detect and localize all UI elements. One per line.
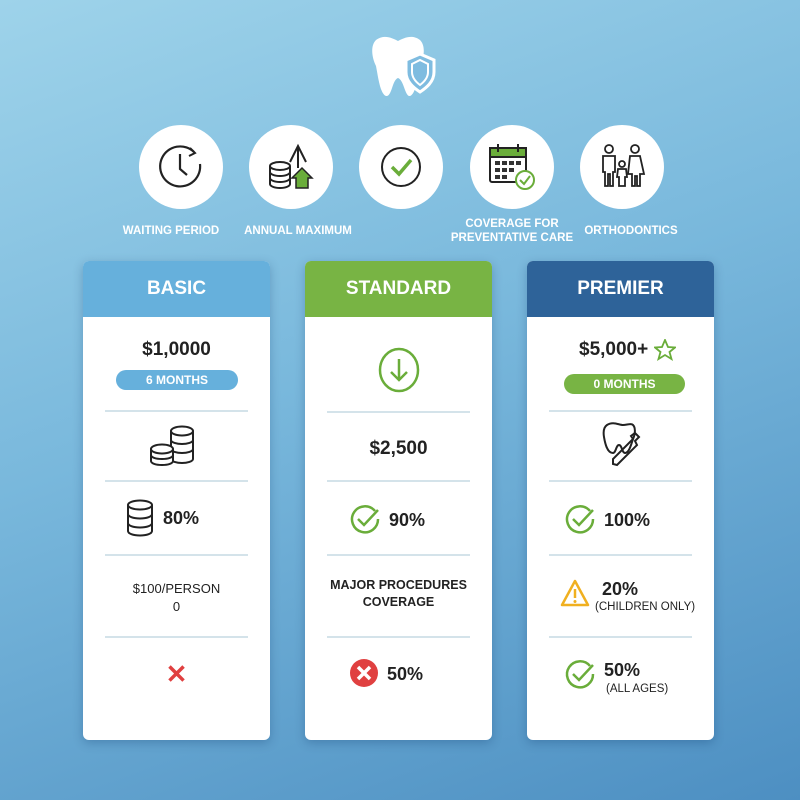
icon circle: check [359,125,443,209]
label: coverage for preventative care: PREVENTATIVE CARE [451,232,573,244]
row: check 90% [350,505,425,534]
text: major procedures coverage [330,578,467,609]
row: red x 50%: 50% [387,664,423,684]
icon circle: waiting period clock [139,125,223,209]
icon: tooth with shield [372,36,436,96]
label: orthodontics: ORTHODONTICS [584,225,678,237]
heading: premier [527,261,714,317]
label: coverage for preventative care [451,218,573,244]
heading: premier: PREMIER [577,278,664,299]
row: check 100% [566,505,650,534]
pill: 0 months: 0 MONTHS [593,377,656,391]
heading: standard [305,261,492,317]
icon circle: family [580,125,664,209]
heading: basic: BASIC [147,278,206,299]
row: $5,000+ star: $5,000+ [579,339,648,360]
icon: down arrow circle [378,348,420,392]
text: major procedures coverage: COVERAGE [363,595,434,609]
row: check 50% all ages [566,660,668,695]
label: waiting period: WAITING PERIOD [123,225,219,237]
icon circle: calendar [470,125,554,209]
text: $100/person 0 [132,581,220,614]
label: coverage for preventative care: COVERAGE FOR [465,218,559,230]
pill: 0 months [564,374,685,394]
icon circle: annual maximum coins arrow [249,125,333,209]
row: database 80% [127,500,199,536]
text: major procedures coverage: MAJOR PROCEDURES [330,578,467,592]
pill: 6 months: 6 MONTHS [146,373,208,387]
row: check 50% all ages: 50% [604,660,640,680]
pill: 6 months [116,370,238,390]
heading: standard: STANDARD [346,278,451,299]
row: $5,000+ star [579,339,676,361]
row: warning 20% children only [560,579,695,613]
row: check 50% all ages: (ALL AGES) [606,683,668,695]
text: $100/person 0: $100/PERSON [133,581,220,596]
heading: basic [83,261,270,317]
icon: red x: ✕ [166,659,187,689]
text: $2,500: $2,500 [369,438,428,459]
row: warning 20% children only: (CHILDREN ONLY) [595,601,695,613]
row: warning 20% children only: 20% [602,579,638,599]
text: $100/person 0: 0 [173,599,180,614]
row: check 90%: 90% [389,510,425,530]
row: database 80%: 80% [163,508,199,528]
panel: premier [527,261,714,740]
icon: tooth wrench [602,422,640,466]
text: $1,0000: $1,0000 [142,339,211,360]
row: check 100%: 100% [604,510,650,530]
label: annual maximum: ANNUAL MAXIMUM [244,225,352,237]
panel: basic [83,261,270,740]
icon: coins [150,426,194,466]
row: red x 50% [350,659,423,687]
panel: standard [305,261,492,740]
